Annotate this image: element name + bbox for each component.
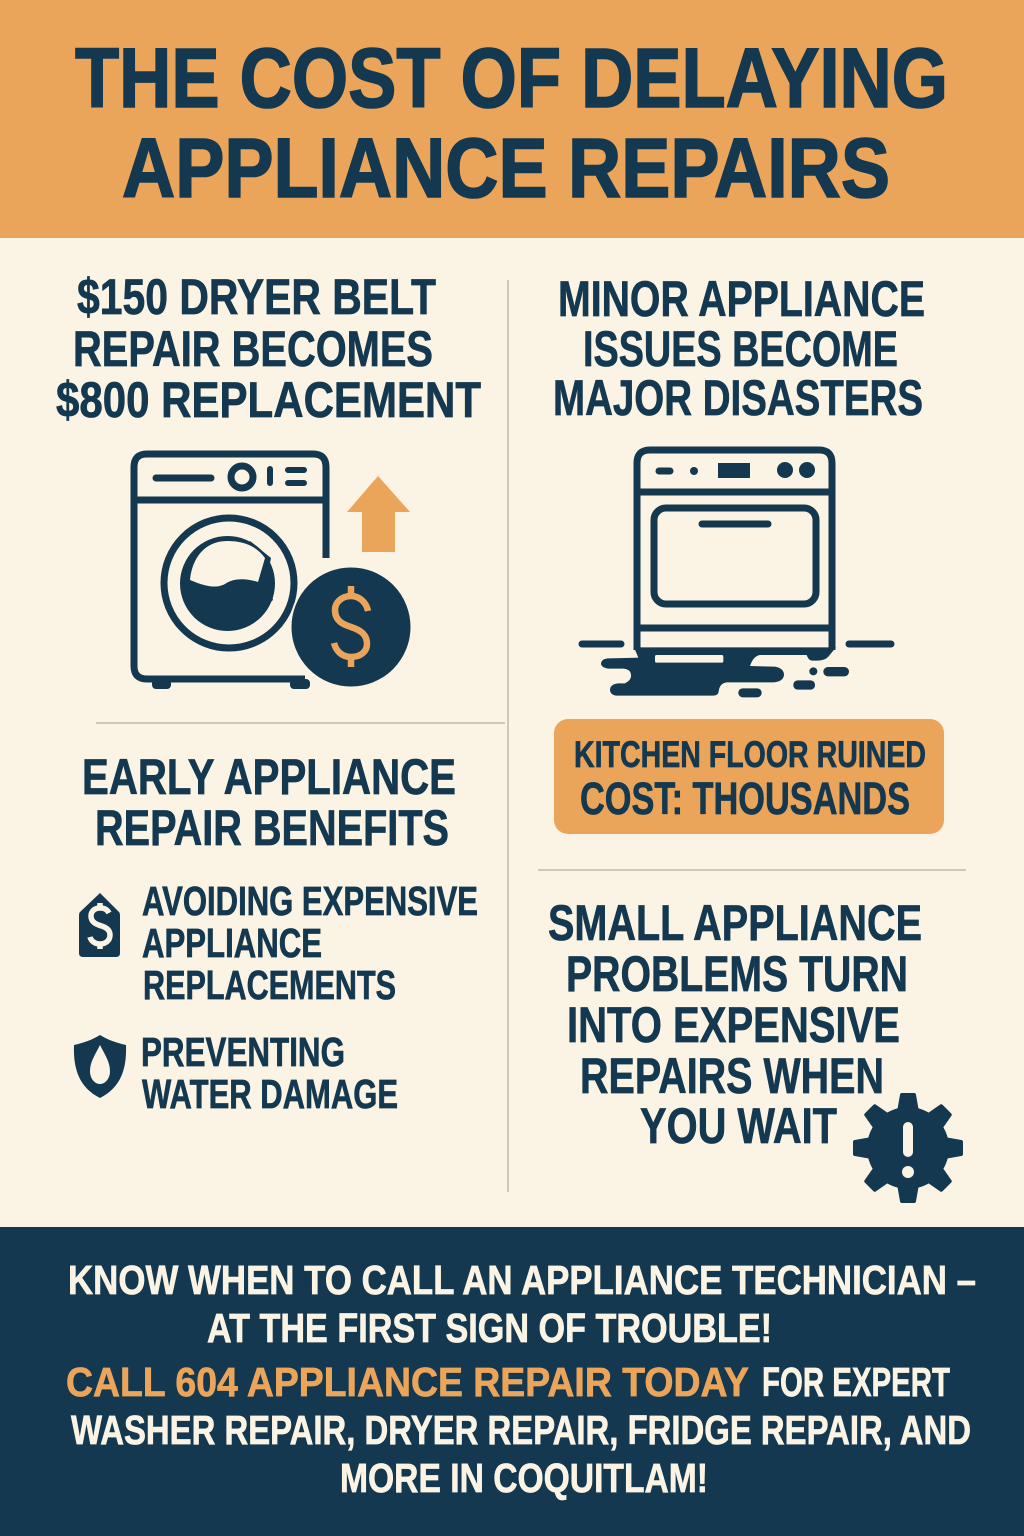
title [75, 31, 948, 215]
footer call to action [0, 1227, 1024, 1536]
heading: dryer belt: REPAIR BECOMES [73, 321, 433, 377]
icon: dollar coin [290, 566, 412, 688]
heading: minor issues: ISSUES BECOME [583, 321, 898, 377]
heading: early benefits: EARLY APPLIANCE [82, 749, 456, 805]
text block: small problems warning: PROBLEMS TURN [566, 946, 908, 1002]
callout: kitchen floor ruined: COST: THOUSANDS [580, 773, 910, 824]
benefit: preventing water damage: PREVENTING [141, 1029, 345, 1075]
heading: minor issues: MAJOR DISASTERS [553, 370, 923, 426]
heading: dryer belt: $800 REPLACEMENT [56, 372, 481, 428]
icon: washer dryer with rising cost [134, 454, 412, 689]
heading: dryer belt [56, 269, 481, 428]
footer line: when to call: AT THE FIRST SIGN OF TROUBLE! [207, 1305, 772, 1351]
footer line: when to call [68, 1257, 976, 1351]
heading: early benefits [82, 749, 456, 856]
text block: small problems warning: INTO EXPENSIVE [567, 997, 900, 1053]
panel: minor issues [553, 271, 944, 834]
text block: small problems warning: YOU WAIT [640, 1098, 837, 1154]
heading: minor issues: MINOR APPLIANCE [558, 271, 925, 327]
panel: early repair benefits [74, 749, 478, 1117]
title: APPLIANCE REPAIRS [122, 121, 890, 215]
benefit: preventing water damage [74, 1029, 398, 1117]
icon: price tag [79, 893, 120, 957]
title banner [0, 0, 1024, 238]
benefit: avoiding replacements: REPLACEMENTS [143, 962, 396, 1008]
icon: warning gear [855, 1095, 961, 1201]
benefit: preventing water damage: WATER DAMAGE [142, 1071, 398, 1117]
callout: kitchen floor ruined: KITCHEN FLOOR RUINED [574, 734, 926, 775]
footer line: call to action: MORE IN COQUITLAM! [340, 1455, 708, 1501]
icon: shield with water drop [74, 1035, 126, 1098]
footer line: call to action: FOR EXPERT [762, 1359, 950, 1405]
footer line: call to action [66, 1359, 971, 1501]
icon: rising arrow [347, 476, 410, 552]
text block: small problems warning: SMALL APPLIANCE [548, 895, 922, 951]
benefit: avoiding replacements [79, 878, 478, 1008]
panel: small problems [548, 895, 961, 1201]
heading: early benefits: REPAIR BENEFITS [95, 800, 449, 856]
heading: dryer belt: $150 DRYER BELT [77, 269, 436, 325]
text block: small problems warning [548, 895, 922, 1154]
benefit: avoiding replacements: APPLIANCE [142, 920, 322, 966]
icon: leaking oven [582, 450, 891, 697]
benefit: avoiding replacements: AVOIDING EXPENSIVE [142, 878, 478, 924]
panel: dryer belt repair [56, 269, 481, 689]
footer line: call to action: CALL 604 APPLIANCE REPAIR TODAY [66, 1359, 749, 1405]
callout: kitchen floor ruined [554, 719, 944, 834]
text block: small problems warning: REPAIRS WHEN [580, 1048, 884, 1104]
heading: minor issues [553, 271, 925, 426]
